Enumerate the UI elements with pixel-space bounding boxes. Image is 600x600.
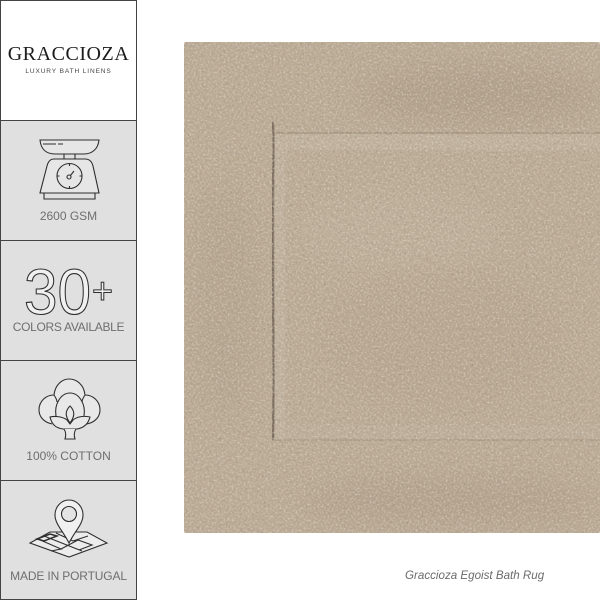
- panel: brand logo: [0, 0, 137, 121]
- panel: colors: [0, 240, 137, 361]
- woven inner border band: [272, 122, 600, 440]
- panel: origin: [0, 480, 137, 600]
- panel: weight: [0, 120, 137, 241]
- panel: material: [0, 360, 137, 481]
- caption: Graccioza Egoist Bath Rug: [405, 569, 544, 582]
- icon: map pin on map: [28, 500, 108, 558]
- label: made in Portugal: MADE IN PORTUGAL: [10, 569, 127, 583]
- number: 30+: 30: [24, 256, 91, 328]
- icon: cotton boll: [38, 378, 101, 440]
- number: 30+: +: [92, 270, 113, 311]
- tagline: LUXURY BATH LINENS: [25, 68, 112, 75]
- label: 100% cotton: 100% COTTON: [26, 449, 111, 463]
- heading: brand name: GRACCIOZA: [8, 43, 129, 65]
- label: colors available: COLORS AVAILABLE: [13, 320, 124, 334]
- label: 2600 GSM: 2600 GSM: [40, 209, 97, 223]
- icon: kitchen scale: [39, 140, 100, 200]
- photo: beige bath rug: [184, 42, 600, 533]
